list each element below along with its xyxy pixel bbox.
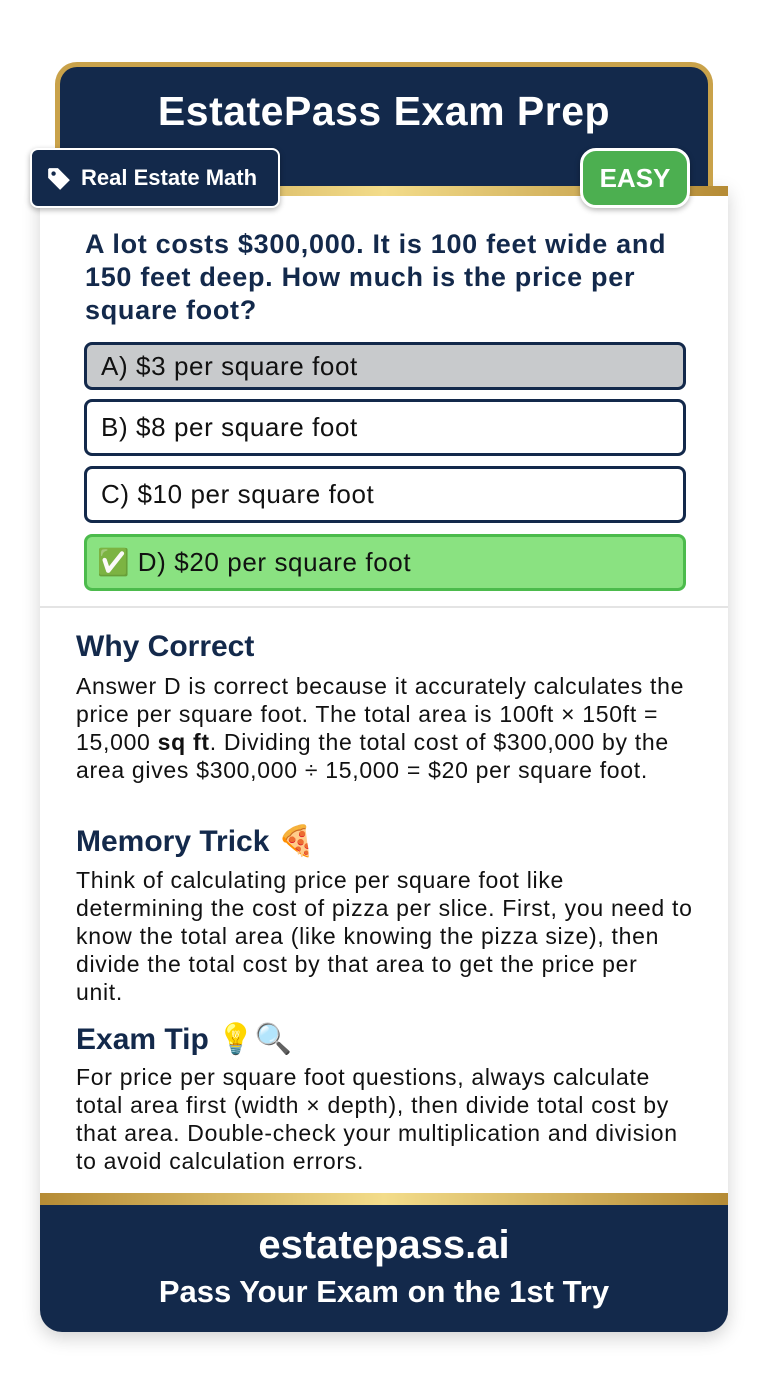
Exam Tip text: For price per square foot questions, always calculate	[76, 1064, 650, 1090]
Why Correct heading: Why Correct	[76, 630, 254, 663]
option A: A) $3 per square foot	[101, 351, 358, 381]
Why Correct text: Answer D is correct because it accurately calculates the	[76, 673, 684, 699]
category tag	[30, 148, 280, 208]
card shadow body	[40, 186, 728, 1332]
Memory Trick text	[76, 867, 693, 1005]
question	[85, 229, 666, 325]
Exam Tip text	[76, 1064, 678, 1174]
Why Correct text: price per square foot. The total area is 100ft × 150ft =	[76, 701, 658, 727]
Exam Tip text: to avoid calculation errors.	[76, 1148, 364, 1174]
Memory Trick text: divide the total cost by that area to get the price per	[76, 951, 637, 977]
difficulty badge	[580, 148, 690, 208]
option C	[84, 466, 686, 523]
question: square foot?	[85, 295, 257, 325]
gold bar top	[40, 186, 728, 196]
Memory Trick text: determining the cost of pizza per slice. First, you need to	[76, 895, 693, 921]
Memory Trick text: know the total area (like knowing the pizza size), then	[76, 923, 659, 949]
footer	[40, 1205, 728, 1332]
Why Correct text: 15,000 sq ft. Dividing the total cost of $300,000 by the	[76, 729, 669, 755]
Why Correct text: area gives $300,000 ÷ 15,000 = $20 per square foot.	[76, 757, 648, 783]
option B: B) $8 per square foot	[101, 412, 358, 442]
Memory Trick text: Think of calculating price per square foot like	[76, 867, 564, 893]
footer tagline: Pass Your Exam on the 1st Try	[159, 1274, 609, 1309]
Exam Tip heading: Exam Tip 💡🔍	[76, 1023, 292, 1056]
gold bar bottom	[40, 1193, 728, 1205]
footer url: estatepass.ai	[258, 1223, 510, 1267]
Why Correct text	[76, 673, 684, 783]
options	[84, 342, 686, 591]
option B	[84, 399, 686, 456]
Exam Tip text: that area. Double-check your multiplication and division	[76, 1120, 678, 1146]
title: EstatePass Exam Prep	[158, 88, 610, 134]
option C: C) $10 per square foot	[101, 479, 374, 509]
category tag: Real Estate Math	[81, 165, 257, 190]
Exam Tip text: total area first (width × depth), then divide total cost by	[76, 1092, 669, 1118]
question: A lot costs $300,000. It is 100 feet wide and	[85, 229, 666, 259]
Memory Trick text: unit.	[76, 979, 123, 1005]
question: 150 feet deep. How much is the price per	[85, 262, 635, 292]
option D correct	[84, 534, 686, 591]
header	[55, 62, 713, 196]
difficulty badge: EASY	[600, 163, 670, 193]
option A	[84, 342, 686, 390]
Memory Trick heading: Memory Trick 🍕	[76, 825, 315, 858]
option D correct: ✅ D) $20 per square foot	[97, 547, 411, 577]
divider	[40, 606, 728, 608]
icon: tag	[48, 168, 70, 190]
